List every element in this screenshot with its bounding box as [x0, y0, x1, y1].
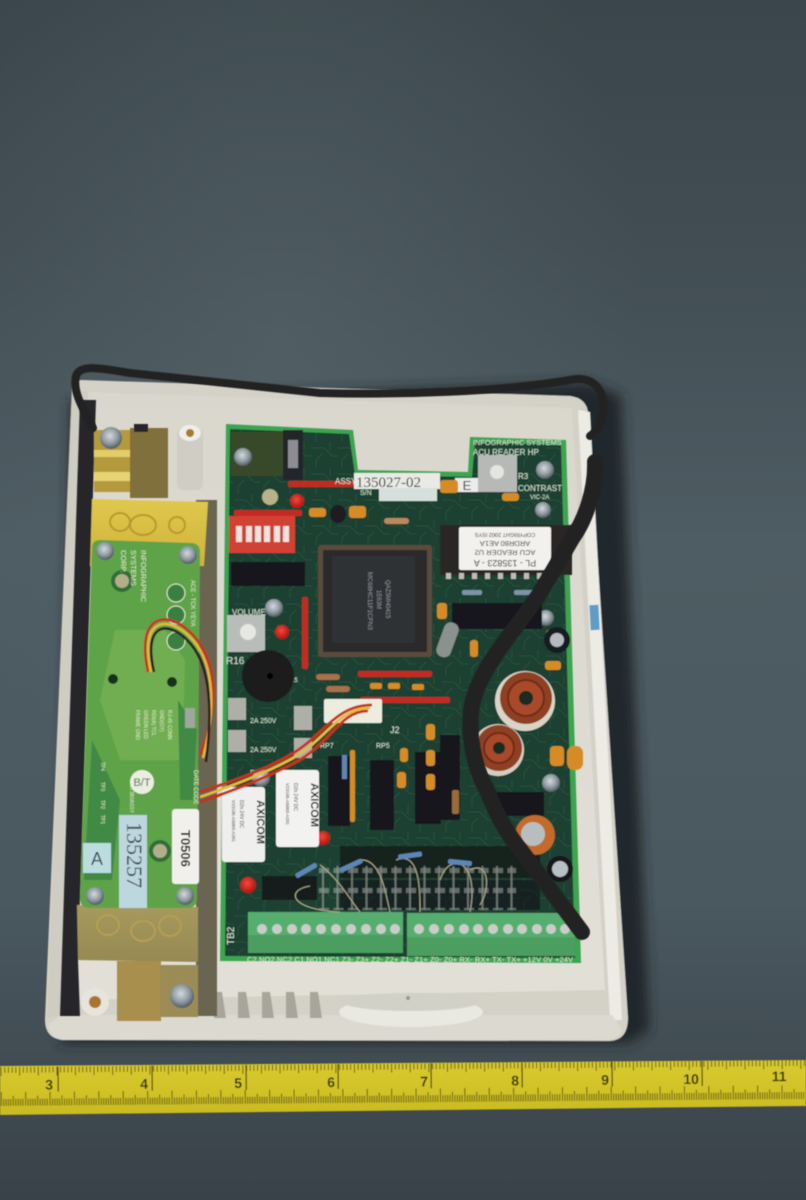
measuring ruler: 6	[327, 1074, 335, 1090]
EPROM chip with label: PL - 135823 - A	[474, 558, 536, 568]
metal crystal	[434, 620, 461, 659]
jumper wires	[295, 858, 487, 912]
relay K1 AXICOM	[222, 787, 266, 862]
slide switch SW1	[283, 430, 303, 480]
silkscreen text: RDI(A) TCL	[150, 710, 156, 736]
handwritten label 135257: 135257	[122, 822, 147, 888]
pin and solder row	[316, 866, 516, 910]
enclosure: shadow and off-white plastic case	[45, 380, 650, 1044]
dark channel left of module	[60, 400, 96, 1016]
silkscreen text: 0T3B0ASSY	[128, 785, 134, 814]
revision sticker E	[455, 478, 480, 493]
board silkscreen	[226, 438, 562, 945]
board silkscreen: 2A 250V	[250, 718, 277, 725]
EPROM chip with label	[440, 525, 572, 579]
dark transistor	[330, 505, 346, 523]
left reader module	[60, 400, 217, 1021]
EPROM chip with label: COPYRIGHT 2002 ISYS	[474, 531, 535, 537]
BIT round marking	[130, 770, 154, 794]
handwritten label A	[83, 843, 111, 873]
BIT round marking: B/T	[133, 777, 151, 789]
enclosure bottom: vents and white round plug	[214, 992, 483, 1027]
PLCC microcontroller: MC68HC11F1CFN3	[366, 572, 373, 630]
reader wire loop	[145, 620, 213, 762]
terminal blocks	[248, 912, 575, 956]
yellow capacitors	[309, 480, 583, 822]
red LEDs	[240, 494, 330, 893]
main circuit board	[200, 424, 583, 964]
ribbon wires from connector to reader	[200, 705, 372, 802]
board silkscreen: RP5	[376, 743, 390, 750]
measuring ruler: 8	[511, 1072, 519, 1089]
dark ICs and resistor arrays	[262, 603, 544, 910]
trim pot R3	[478, 455, 517, 492]
label T0506	[172, 809, 199, 884]
silkscreen text: TP4	[99, 762, 105, 771]
black foam gasket seal	[75, 368, 603, 932]
black piezo buzzer	[242, 650, 294, 702]
copper toroid coils	[472, 671, 555, 776]
silkscreen text: CORP.	[119, 550, 128, 573]
EPROM chip with label: ARDR80 AE1A	[480, 539, 530, 548]
measuring ruler	[0, 1060, 806, 1115]
serial number sticker	[354, 473, 440, 491]
white connector J3	[324, 699, 382, 723]
silkscreen text: GND(GY)	[158, 710, 164, 732]
silkscreen text	[99, 550, 198, 824]
revision sticker E: E	[463, 478, 472, 493]
silkscreen text: TP1	[99, 815, 105, 824]
terminal labels: C2 NO2 NC2 C1 NO1 NC1 Z3- Z3+ Z2- Z2+ Z1- Z1+ Z0- Z0+ RX- RX+ TX- TX+ +12V 0V +24V	[247, 955, 573, 964]
silkscreen text: DATE CODE	[192, 770, 198, 805]
measuring ruler: 9	[601, 1072, 609, 1088]
board silkscreen: R3	[518, 472, 529, 481]
relay K2 AXICOM: V23105-A5003-A201	[285, 783, 290, 826]
EPROM chip with label: ACU READER U2	[475, 548, 535, 557]
serial number sticker: 135027-02	[356, 475, 421, 491]
silkscreen text: ACE - TCK YEYA	[189, 580, 195, 627]
board silkscreen: R5	[290, 678, 298, 684]
silkscreen text: TP3	[99, 782, 105, 791]
measuring ruler: 11	[772, 1068, 787, 1084]
measuring ruler: 7	[420, 1073, 428, 1089]
gold plate top	[90, 499, 208, 566]
handwritten label 135257	[119, 815, 147, 908]
PLCC microcontroller	[318, 545, 432, 657]
mounting screws	[234, 448, 560, 792]
board silkscreen: 2A 250V	[250, 747, 277, 754]
board silkscreen: CONTRAST	[518, 484, 562, 493]
silkscreen text: INFOGRAPHIC	[139, 550, 148, 603]
label T0506: T0506	[178, 830, 193, 867]
DIP switch	[229, 516, 295, 553]
board silkscreen: J2	[390, 725, 400, 735]
green daughter board	[80, 540, 200, 908]
silkscreen text: RJ-45 CONN	[166, 710, 172, 740]
relay K2 AXICOM: D2n 24V DC	[292, 783, 298, 811]
axial blue resistors	[295, 851, 472, 879]
silkscreen text: GREEN LED	[142, 710, 148, 739]
top left olive area	[231, 432, 285, 476]
brown shadow strip right of module	[196, 500, 217, 1016]
board silkscreen: VIC-2A	[530, 495, 549, 501]
fuses	[228, 698, 312, 758]
trim pot R16 volume	[227, 615, 265, 652]
white standoff top	[177, 425, 203, 490]
lower plate	[77, 905, 198, 962]
relay K1 AXICOM: V23105-A5003-A201	[231, 800, 236, 843]
axial resistors	[316, 518, 534, 779]
measuring ruler: 10	[683, 1071, 699, 1087]
DIP IC U4	[231, 562, 305, 586]
board silkscreen: R16	[226, 656, 245, 667]
handwritten label A: A	[91, 849, 103, 869]
measuring ruler: 4	[140, 1076, 148, 1092]
red resistor network bars	[234, 481, 450, 703]
board silkscreen: RP7	[320, 743, 334, 750]
blue sticker fragment on the rim	[589, 605, 600, 630]
relay K1 AXICOM: D2n 24V DC	[238, 800, 244, 828]
relay K2 AXICOM: AXICOM	[308, 783, 320, 827]
top mounting bracket	[94, 424, 168, 498]
white standoff bottom	[81, 988, 109, 1016]
measuring ruler: 5	[234, 1075, 242, 1091]
relay K2 AXICOM	[276, 770, 320, 847]
board silkscreen: ACU READER HP	[473, 448, 539, 457]
blank white strip	[379, 488, 437, 501]
silkscreen text: FRAME GND	[134, 710, 140, 740]
lower bracket	[117, 961, 198, 1021]
electrolytic capacitors	[515, 627, 573, 882]
PLCC microcontroller: QAZ5MH0415	[384, 580, 390, 619]
silkscreen text: SYSTEMS	[129, 550, 138, 586]
silkscreen text: TP2	[99, 800, 105, 809]
board silkscreen: ASSY	[335, 477, 357, 486]
board silkscreen: S/N	[360, 490, 372, 497]
measuring ruler: 3	[45, 1077, 53, 1093]
board silkscreen: VOLUME	[232, 608, 266, 617]
board silkscreen: INFOGRAPHIC SYSTEMS	[473, 438, 562, 447]
board silkscreen: TB2	[226, 926, 237, 945]
PLCC microcontroller: 1E63M	[375, 590, 381, 609]
board silkscreen: F2	[250, 770, 258, 777]
relay K1 AXICOM: AXICOM	[254, 800, 266, 844]
